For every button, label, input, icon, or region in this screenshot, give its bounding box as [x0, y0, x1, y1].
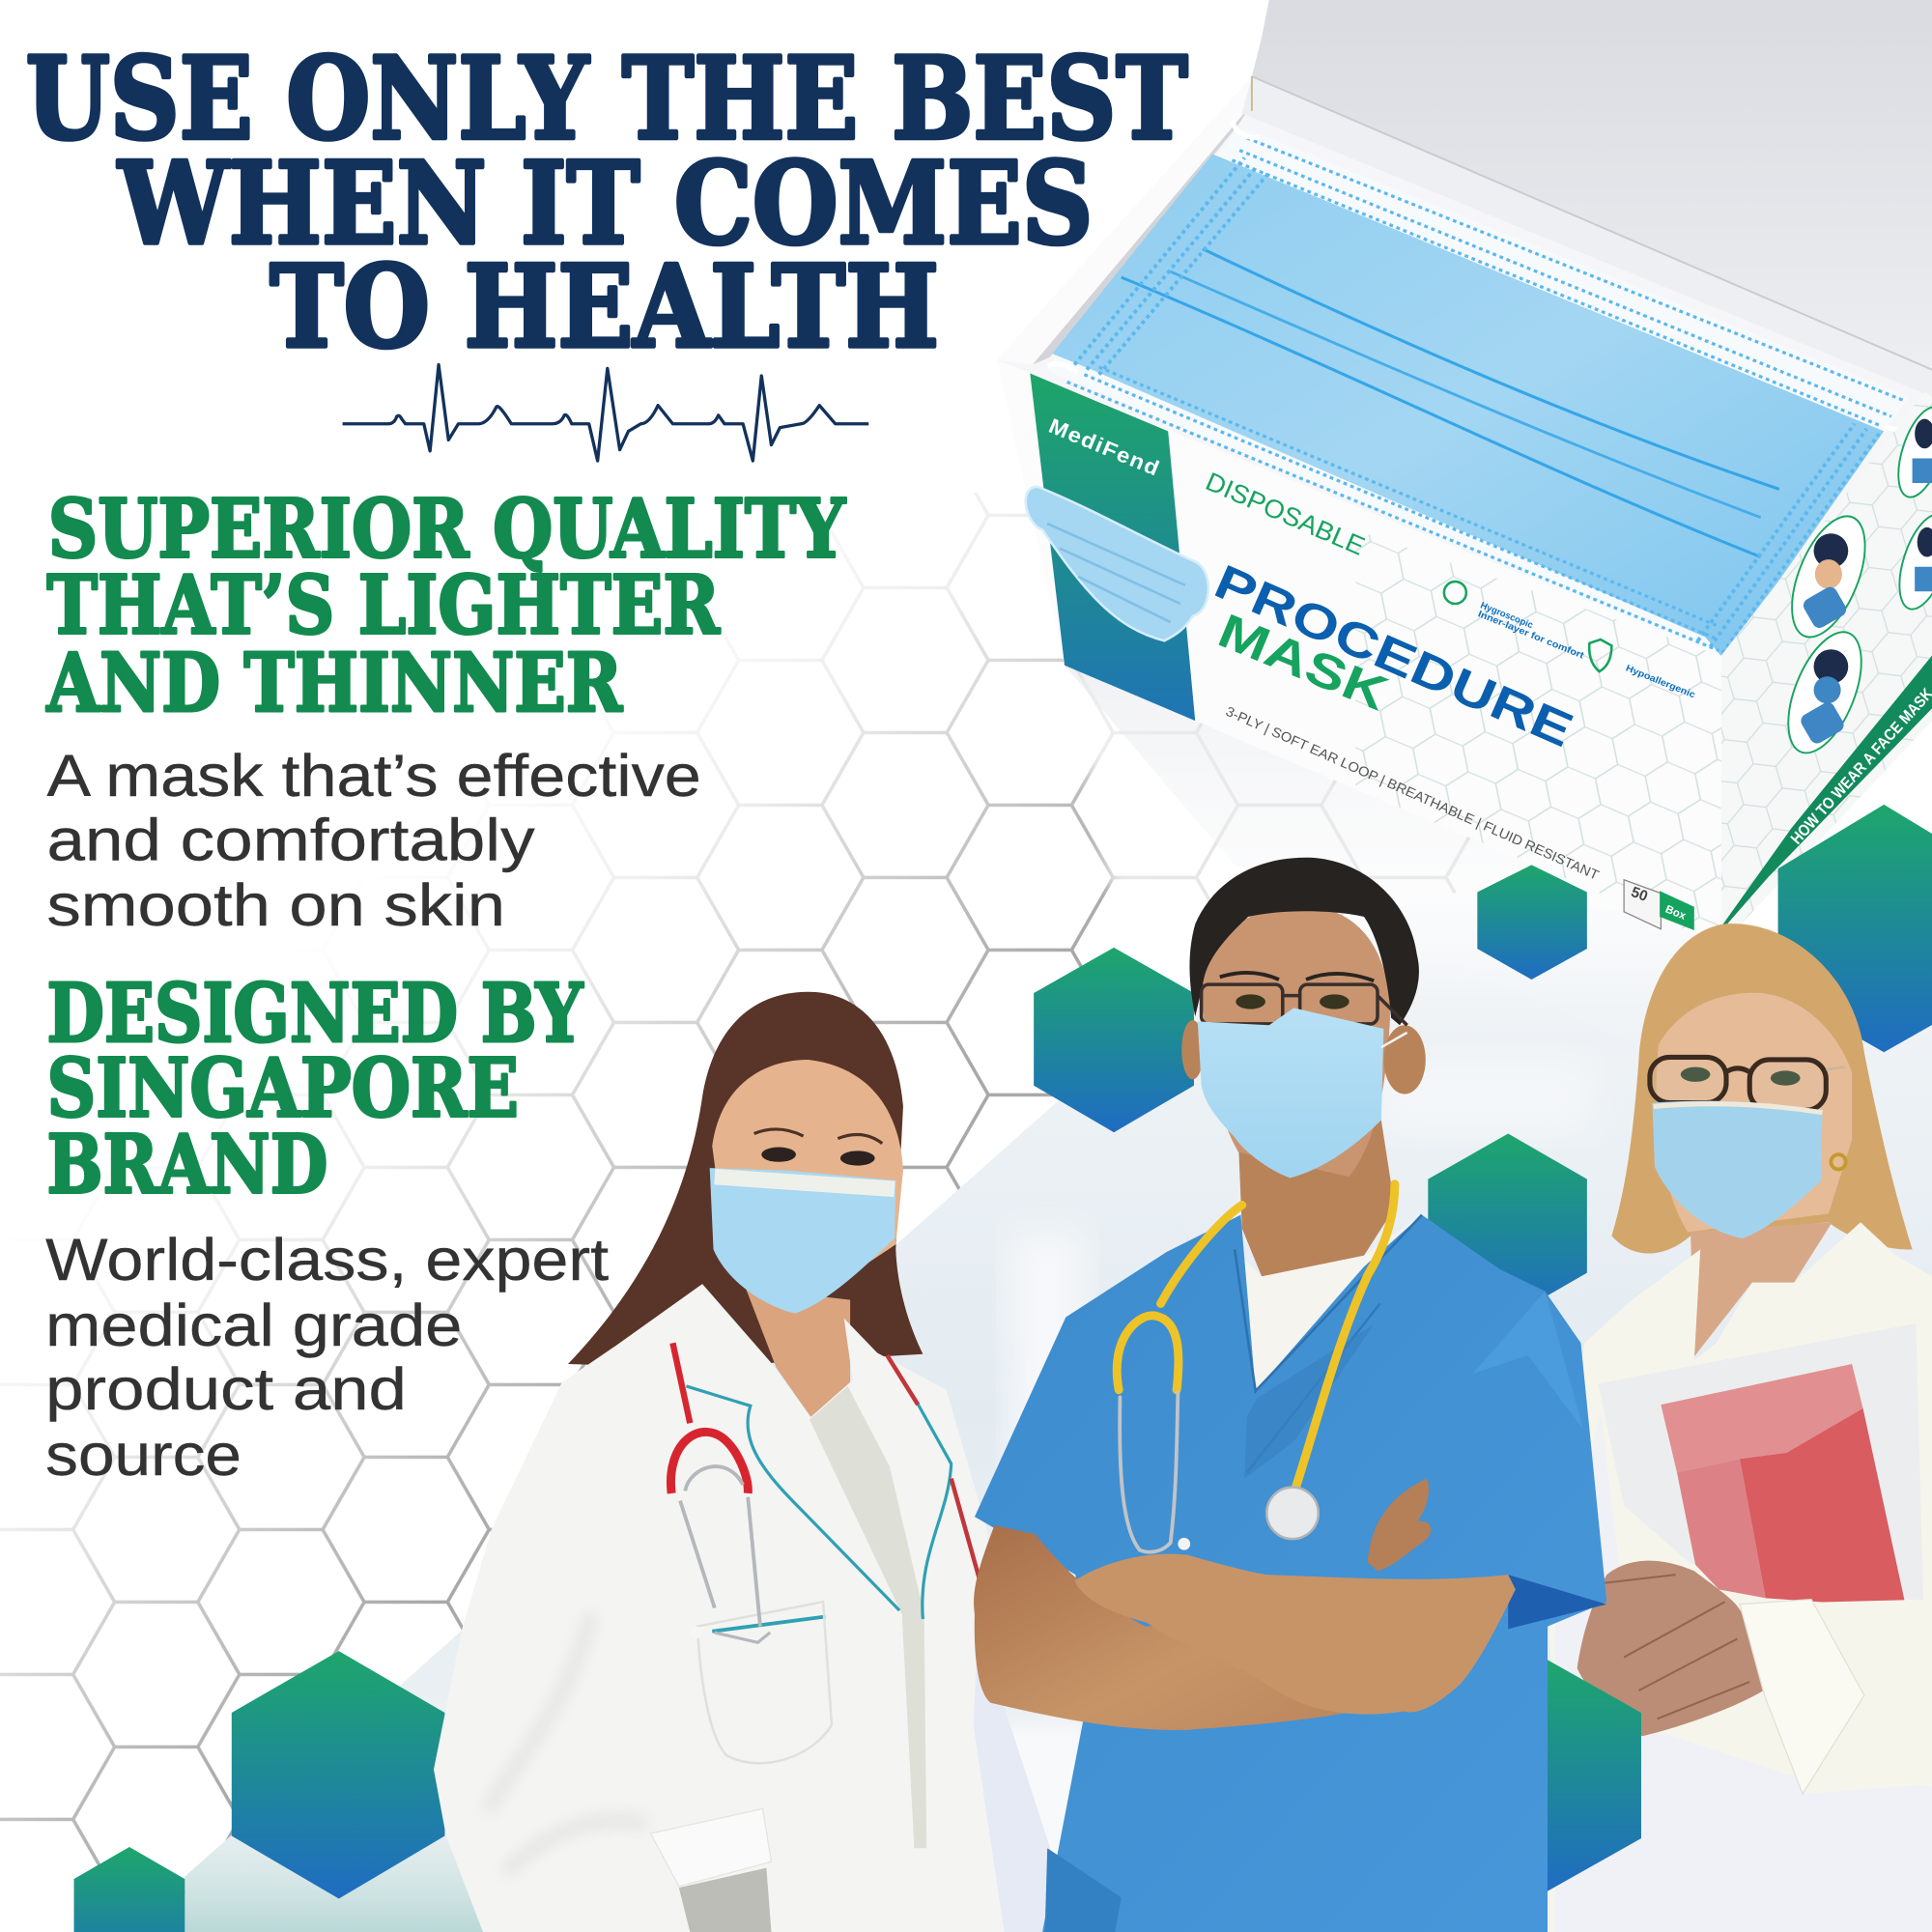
box interior rim	[997, 76, 1932, 656]
box labels: DISPOSABLE	[1202, 467, 1369, 561]
pack size badge	[1624, 880, 1694, 930]
title: TO HEALTH	[270, 240, 939, 373]
box front face	[997, 359, 1721, 945]
background: pale wash over lattice below the box	[1072, 666, 1602, 974]
neck	[1238, 1120, 1395, 1276]
hexagon accent behind centre doctor	[1449, 1659, 1641, 1892]
heading: superior quality: THAT’S LIGHTER	[46, 558, 721, 653]
heading: designed by singapore brand	[46, 966, 583, 1212]
undershirt	[1235, 1215, 1422, 1391]
sleeve and cuff	[1740, 1600, 1932, 1794]
stethoscope	[670, 1343, 980, 1642]
folder	[1598, 1323, 1923, 1602]
pack size badge: Box	[1663, 904, 1688, 923]
yellow stethoscope	[1117, 1184, 1395, 1552]
head	[1202, 906, 1390, 1177]
product box: procedure mask: PROCEDURE	[1207, 554, 1581, 757]
background: hexagon lattice	[0, 493, 1540, 1932]
mask stack	[1046, 121, 1913, 659]
product box: procedure mask: MASK	[1210, 603, 1396, 721]
eyes and brows	[761, 1148, 796, 1162]
hair	[1189, 858, 1419, 1025]
hair	[1611, 923, 1913, 1254]
coat	[434, 1284, 1051, 1932]
glasses	[1650, 1057, 1844, 1110]
title: WHEN IT COMES	[117, 136, 1093, 270]
title: USE ONLY THE BEST	[26, 32, 1188, 165]
crossed arms	[974, 1525, 1363, 1730]
text block: brand description: source	[45, 1422, 242, 1488]
heading: superior quality	[46, 482, 846, 730]
heading: superior quality: SUPERIOR QUALITY	[48, 482, 846, 577]
earring	[1831, 1154, 1846, 1169]
text block: brand description: product and	[45, 1356, 407, 1422]
product box: procedure mask: 3-PLY | SOFT EAR LOOP | BREATHABLE | FLUID RESISTANT	[1224, 703, 1602, 883]
coat cuff and pocket gap	[650, 1808, 771, 1932]
text block: brand description	[45, 1227, 609, 1488]
face mask	[710, 1168, 895, 1314]
brand: MediFend: MediFend	[1045, 413, 1164, 481]
mask image on box	[1026, 487, 1208, 640]
product box: procedure mask: Hypoallergenic	[1624, 663, 1697, 701]
shirt	[1547, 1222, 1932, 1932]
coat sleeve tint	[974, 1589, 1051, 1932]
text block: mask description: and comfortably	[46, 807, 535, 872]
text block: brand description: medical grade	[45, 1293, 462, 1358]
lapel trim	[686, 1386, 952, 1632]
face	[1657, 993, 1852, 1233]
product box: procedure mask: Inner-layer for comfort	[1476, 609, 1586, 662]
product box: procedure mask	[997, 76, 1932, 1084]
text block: mask description: smooth on skin	[46, 872, 505, 938]
face	[712, 1060, 903, 1316]
person: doctor on the left	[434, 992, 1051, 1932]
coat folds	[487, 1614, 647, 1873]
text block: mask description	[46, 743, 701, 938]
undershirt	[810, 1386, 926, 1848]
neck	[1690, 1222, 1833, 1356]
box side face	[1721, 392, 1932, 945]
product box: procedure mask: Hygroscopic	[1479, 600, 1535, 632]
heading: superior quality: AND THINNER	[46, 636, 623, 730]
person: nurse with folder on the right	[1547, 923, 1932, 1932]
person: doctor in blue scrubs in the centre	[974, 858, 1606, 1932]
glasses	[1202, 984, 1407, 1025]
green panel	[1030, 373, 1195, 721]
heading: designed by singapore brand: DESIGNED BY	[46, 966, 583, 1061]
face mask	[1198, 1008, 1383, 1178]
box lid	[1252, 0, 1932, 392]
text block: mask description: A mask that’s effective	[46, 743, 701, 809]
pack size badge: 50	[1629, 884, 1650, 905]
hair	[568, 992, 923, 1368]
icon: heartbeat line	[343, 365, 868, 461]
neck	[746, 1288, 850, 1417]
box reflection	[1065, 666, 1721, 1084]
side panel band: how to wear a face mask	[1721, 656, 1932, 926]
background: blurred hospital photo	[185, 887, 1932, 1932]
icon: head	[1444, 582, 1466, 604]
face mask	[1652, 1101, 1822, 1238]
icon: shield	[1589, 639, 1611, 671]
heading: designed by singapore brand: SINGAPORE	[46, 1041, 519, 1136]
title	[26, 32, 1188, 373]
text block: brand description: World-class, expert	[45, 1227, 609, 1293]
side panel illustrations	[1774, 402, 1932, 763]
pocket	[697, 1602, 832, 1763]
hexagon accents	[74, 805, 1932, 1932]
hands	[1577, 1561, 1766, 1736]
heading: designed by singapore brand: BRAND	[46, 1118, 327, 1212]
scrubs	[975, 1215, 1606, 1932]
